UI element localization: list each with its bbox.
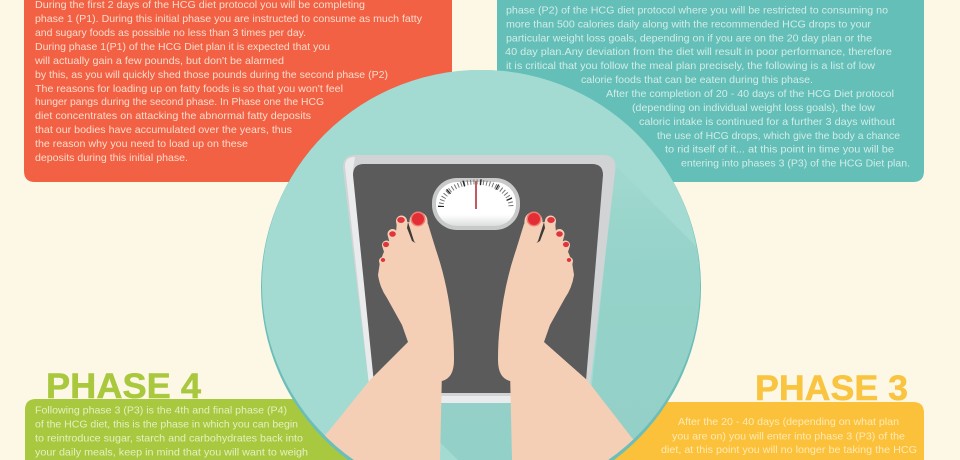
text block: phase 2 description: entering into phases 3 (P3) of the HCG Diet plan. <box>681 158 910 170</box>
text block: phase 4 description: your daily meals, keep in mind that you will want to weigh <box>35 446 308 458</box>
panel: phase 2 <box>497 0 924 182</box>
text block: phase 2 description: caloric intake is continued for a further 3 days without <box>639 116 895 128</box>
scale body <box>343 155 616 403</box>
text block: phase 2 description: calorie foods that can be eaten during this phase. <box>581 74 813 86</box>
text block: phase 1 description: During phase 1(P1) of the HCG Diet plan it is expected that you <box>35 41 330 53</box>
text block: phase 1 description: The reasons for loading up on fatty foods is so that you won't feel <box>35 83 343 95</box>
text block: phase 2 description: to rid itself of it... at this point in time you will be <box>665 144 894 156</box>
text block: phase 4 description: of the HCG diet, this is the phase in which you can begin <box>35 418 298 430</box>
text block: phase 1 description <box>34 0 423 164</box>
text block: phase 2 description: phase (P2) of the HCG diet protocol where you will be restricted to consuming no <box>506 4 888 16</box>
text block: phase 3 description: After the 20 - 40 days (depending on what plan <box>678 416 899 428</box>
text block: phase 2 description: it is critical that you follow the meal plan precisely, the following is a list of low <box>506 60 875 72</box>
text block: phase 2 description: (depending on individual weight loss goals), the low <box>632 102 875 114</box>
text block: phase 1 description: hunger pangs during the second phase. In Phase one the HCG <box>35 96 324 108</box>
text block: phase 2 description: After the completion of 20 - 40 days of the HCG Diet protocol <box>606 88 894 100</box>
panel: phase 4 <box>25 399 400 460</box>
text block: phase 1 description: deposits during this initial phase. <box>35 152 188 164</box>
scale dial <box>432 178 520 230</box>
text block: phase 1 description: phase 1 (P1). During this initial phase you are instructed to consume as much fatty <box>35 13 423 25</box>
left foot and leg <box>324 212 454 460</box>
heading: phase 4: PHASE 4 <box>46 367 202 406</box>
text block: phase 4 description: to reintroduce sugar, starch and carbohydrates back into <box>35 432 303 444</box>
text block: phase 1 description: diet concentrates on attacking the abnormal fatty deposits <box>35 110 311 122</box>
panel: phase 1 <box>24 0 452 182</box>
text block: phase 2 description: particular weight loss goals, depending on if you are on the 20 day plan or the <box>506 32 872 44</box>
illustration: feet on a bathroom scale <box>260 70 705 460</box>
text block: phase 2 description: 40 day plan.Any deviation from the diet will result in poor performance, therefore <box>505 46 892 58</box>
text block: phase 2 description <box>505 4 910 170</box>
text block: phase 1 description: the reason why you need to load up on these <box>35 138 248 150</box>
text block: phase 2 description: the use of HCG drops, which give the body a chance <box>657 130 900 142</box>
text block: phase 1 description: will actually gain a few pounds, but don't be alarmed <box>34 55 284 67</box>
text block: phase 3 description <box>661 416 917 456</box>
text block: phase 1 description: and sugary foods as possible no less than 3 times per day. <box>35 27 306 39</box>
panel: phase 3 <box>570 402 924 460</box>
text block: phase 4 description <box>35 404 308 458</box>
right foot and leg <box>498 212 634 460</box>
text block: phase 3 description: diet, at this point you will no longer be taking the HCG <box>661 444 917 456</box>
text block: phase 4 description: Following phase 3 (P3) is the 4th and final phase (P4) <box>35 404 287 416</box>
text block: phase 1 description: that our bodies have accumulated over the years, thus <box>35 124 292 136</box>
text block: phase 3 description: you are on) you will enter into phase 3 (P3) of the <box>672 430 905 442</box>
text block: phase 1 description: by this, as you will quickly shed those pounds during the second phase (P2) <box>35 69 388 81</box>
text block: phase 2 description: more than 500 calories daily along with the recommended HCG drops to your <box>506 18 871 30</box>
heading: phase 3: PHASE 3 <box>755 369 908 408</box>
